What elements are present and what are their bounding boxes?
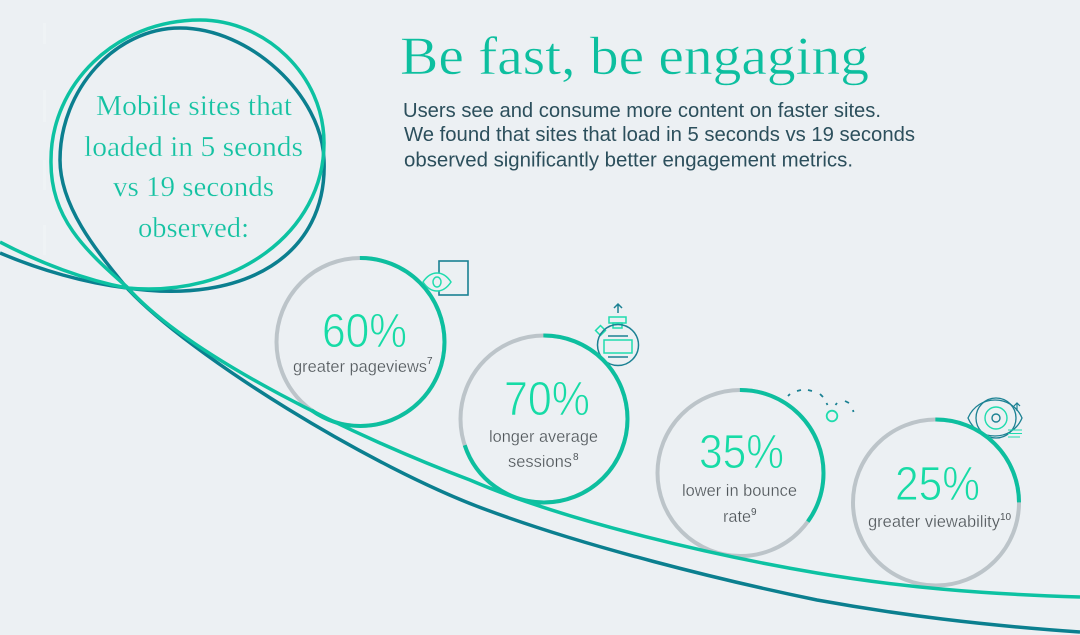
intro text block: Users see and consume more content on faster sites. (403, 100, 881, 122)
stat: 70% longer average sessions (460, 336, 628, 502)
callout text: mobile sites: Mobile sites that (96, 91, 292, 122)
stat: 35% lower in bounce rate: 9 (751, 507, 757, 518)
stat: 70% longer average sessions: 70% (504, 373, 590, 426)
stat: 60% greater pageviews: 7 (427, 356, 433, 367)
callout text: mobile sites: loaded in 5 seonds (84, 132, 303, 163)
title: Be fast, be engaging (400, 26, 869, 86)
icon: bounce path (788, 390, 854, 421)
intro text block: We found that sites that load in 5 seconds vs 19 seconds (404, 124, 915, 146)
stat: 70% longer average sessions: longer average (489, 427, 598, 446)
stat: 25% greater viewability: 10 (1000, 512, 1011, 523)
stat: 70% longer average sessions: sessions (508, 452, 572, 471)
stat: 60% greater pageviews: 60% (322, 305, 407, 358)
icon: eye and square (423, 261, 468, 295)
stat: 60% greater pageviews: greater pageviews (293, 357, 427, 376)
icon: stopwatch (596, 304, 638, 366)
intro text block: observed significantly better engagement metrics. (404, 150, 853, 172)
stat: 25% greater viewability (853, 420, 1019, 586)
intro text block (403, 100, 915, 172)
icon: eye viewability (968, 398, 1022, 438)
callout text: mobile sites (84, 91, 303, 244)
stat: 35% lower in bounce rate: rate (723, 507, 751, 526)
stat: 60% greater pageviews (276, 258, 444, 426)
stat: 25% greater viewability: 25% (895, 458, 980, 511)
callout text: mobile sites: observed: (138, 213, 249, 244)
stat: 70% longer average sessions: 8 (573, 452, 579, 463)
stat: 35% lower in bounce rate: lower in bounce (682, 481, 797, 500)
callout text: mobile sites: vs 19 seconds (113, 172, 274, 203)
stat: 35% lower in bounce rate (658, 390, 824, 556)
stat: 35% lower in bounce rate: 35% (699, 426, 784, 479)
stat: 25% greater viewability: greater viewability (868, 512, 1000, 531)
